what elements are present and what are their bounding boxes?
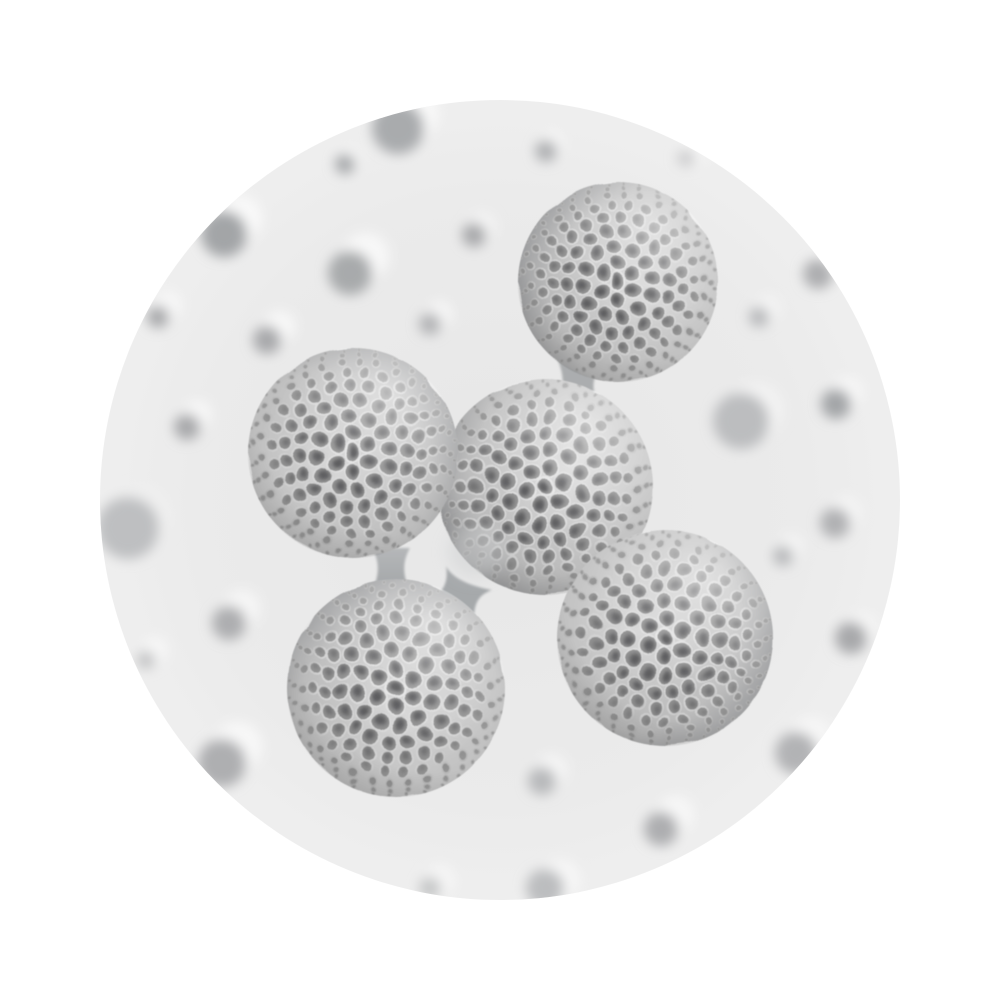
blurred sphere: left middle — [253, 311, 295, 354]
right porous sphere — [556, 530, 774, 746]
blurred sphere: right small — [744, 304, 772, 332]
blurred background spheres — [97, 88, 877, 907]
blurred sphere: top right faint — [675, 149, 695, 169]
blurred sphere: lower right — [835, 613, 877, 654]
illustration: porous microspheres in a circle — [100, 100, 900, 900]
blurred sphere: lower left — [212, 590, 260, 640]
blurred sphere: right lower — [820, 497, 861, 538]
blurred sphere: right — [821, 377, 863, 419]
blurred sphere: upper middle — [328, 233, 389, 295]
blurred sphere: bottom edge — [521, 865, 566, 899]
blurred sphere: bottom right small — [644, 796, 694, 846]
blurred sphere: bottom left large — [198, 722, 262, 787]
connector stalks — [370, 356, 604, 618]
blurred sphere: right large — [708, 390, 772, 454]
blurred sphere: small top — [335, 147, 361, 174]
stalk: top sphere to centre sphere — [556, 356, 604, 392]
centre porous sphere — [440, 378, 654, 596]
stalk: left sphere to bottom sphere — [370, 548, 412, 596]
top right porous sphere — [518, 182, 718, 382]
circular backdrop — [100, 100, 900, 900]
fade at lower left of centre sphere — [448, 526, 504, 578]
blurred sphere: centre small — [414, 310, 446, 340]
blurred sphere: right upper — [803, 248, 844, 289]
blurred sphere: bottom edge small — [416, 876, 442, 896]
blurred sphere: near top cluster — [462, 213, 495, 247]
blurred sphere: top edge — [366, 106, 432, 160]
left porous sphere — [248, 348, 458, 558]
blurred sphere: top centre — [535, 131, 564, 162]
blurred sphere: left lower — [174, 400, 212, 440]
blurred sphere: bottom right — [770, 728, 818, 778]
blurred sphere: far lower left — [134, 650, 156, 672]
stalk: centre sphere to bottom sphere — [436, 566, 492, 618]
blurred sphere: left large — [100, 492, 163, 564]
bottom left porous sphere — [286, 579, 506, 798]
blurred sphere: right small lower — [769, 544, 796, 570]
blurred sphere: bottom centre — [523, 764, 559, 800]
blurred sphere: left — [142, 302, 173, 334]
blurred sphere: upper left — [201, 196, 262, 257]
